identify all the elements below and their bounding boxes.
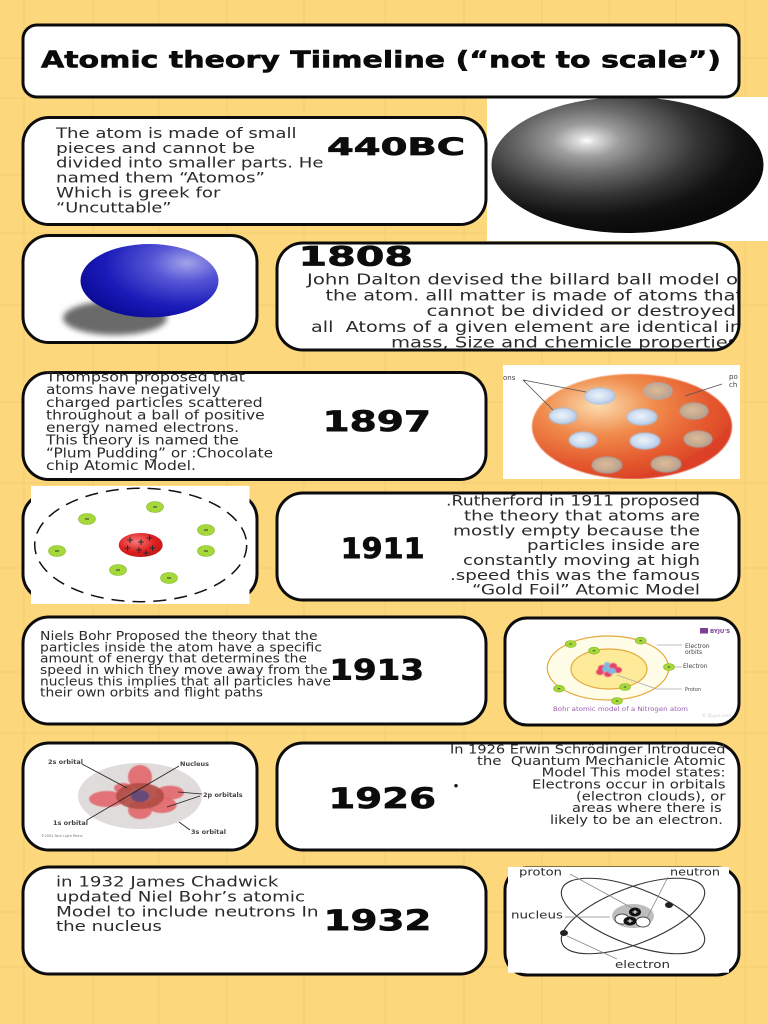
icon: sphere shadow: [63, 301, 167, 335]
year: 1926: 1926: [328, 782, 436, 816]
year: 440BC: 440BC: [327, 133, 465, 161]
text: 1926 description: the Quantum Mechanicle Atomic: [477, 753, 726, 768]
nucleus charges: +: [126, 536, 134, 546]
callouts: Electron: [683, 663, 708, 670]
callouts: orbits: [685, 649, 702, 656]
icon: nucleus: [612, 904, 654, 928]
icon: electrons: [549, 383, 712, 473]
panel: 1913: [23, 617, 486, 724]
panel: Chadwick model image: [505, 863, 739, 975]
text: 1911 description: constantly moving at high: [463, 553, 700, 569]
callouts: [503, 373, 738, 410]
text: 1932 description: updated Niel Bohr’s atomic: [56, 890, 305, 906]
panel: 1911 image backing: [23, 486, 257, 604]
text: 1926 description: [450, 742, 727, 827]
year: 1808: 1808: [298, 242, 413, 272]
text: 1913 description: their own orbits and flight paths: [40, 686, 263, 700]
text: 440BC description: Which is greek for: [56, 186, 221, 202]
title: Atomic theory Tiimeline (“not to scale”): [41, 48, 721, 74]
nucleus charges: +: [124, 544, 131, 554]
panel: 1932: [23, 867, 486, 974]
title panel: [23, 25, 739, 97]
text: 1913 description: particles inside the atom have a specific: [40, 640, 322, 654]
year: 1932: 1932: [324, 904, 431, 938]
panel: blue sphere: [23, 236, 257, 342]
callouts: neutron: [670, 866, 720, 878]
text: 440BC description: named them “Atomos”: [56, 170, 265, 186]
text: 1926 description: (electron clouds), or: [576, 788, 727, 803]
text: 1932 description: in 1932 James Chadwick: [56, 874, 280, 890]
icon: dashed orbit: [35, 488, 247, 602]
text: 1911 description: “Gold Foil” Atomic Model: [472, 582, 700, 598]
text: 1911 description: mostly empty because the: [453, 524, 700, 540]
text: 440BC description: The atom is made of small: [55, 126, 296, 142]
nucleus charges: +: [137, 538, 145, 548]
panel: 1911: [277, 493, 739, 600]
nucleus charges: +: [146, 534, 153, 544]
image: Rutherford model: [31, 486, 250, 604]
year: 1897: 1897: [322, 406, 431, 438]
image backing: [508, 867, 729, 973]
text: 440BC description: pieces and cannot be: [56, 141, 255, 157]
year: 1913: 1913: [329, 654, 424, 687]
text: 440BC description: “Uncuttable”: [56, 200, 172, 216]
panel: 1926: [277, 742, 739, 850]
text: 1897 description: “Plum Pudding” or :Chocolate: [46, 446, 273, 462]
text: 1932 description: the nucleus: [56, 919, 162, 935]
callouts: electron: [615, 959, 670, 971]
panel: 1897: [23, 370, 486, 480]
callouts: [41, 758, 243, 838]
text: 1932 description: Model to include neutrons In: [56, 904, 319, 920]
callouts: Nucleus: [180, 760, 209, 768]
watermark: © Byjus.com: [702, 712, 731, 719]
text: 1926 description: likely to be an electron.: [550, 812, 723, 827]
icon: p orbital lobes: [89, 765, 184, 819]
text: 1808 description: cannot be divided or destroyed: [426, 302, 736, 320]
callouts: [511, 866, 720, 971]
icon: orbits: [552, 863, 714, 969]
text: 1911 description: the theory that atoms are: [464, 508, 700, 524]
text: 1913 description: Niels Bohr Proposed the theory that the: [40, 629, 318, 643]
callouts: Electron: [685, 643, 710, 650]
panel outline: [277, 243, 739, 350]
icon: blue sphere: [80, 244, 218, 317]
icon: orbits: [547, 636, 669, 700]
text: 1911 description: [446, 494, 700, 598]
text: 1897 description: This theory is named the: [45, 434, 239, 448]
text: 1808 description: mass, Size and chemicle properties: [391, 334, 738, 352]
text: 1926 description: Model This model states:: [542, 765, 726, 780]
text: 1897 description: atoms have negatively: [46, 383, 221, 398]
icon: nucleus: [596, 662, 622, 677]
logo: [700, 628, 730, 635]
text: 1897 description: Thompson proposed that: [45, 370, 245, 386]
panel: 1808: [277, 242, 746, 352]
callouts: nucleus: [511, 910, 563, 922]
icon: electrons: [554, 637, 674, 704]
nucleus charges: +: [149, 544, 156, 554]
text: 1897 description: chip Atomic Model.: [46, 459, 196, 474]
callouts: ©2002 Nick Light Reins: [41, 834, 83, 838]
callouts: proton: [519, 866, 562, 878]
text: 440BC description: divided into smaller parts. He: [56, 156, 324, 172]
callouts: po: [729, 373, 738, 381]
callouts: 2s orbital: [48, 758, 83, 766]
text: 1897 description: charged particles scattered: [46, 396, 263, 411]
text: 1926 description: areas where there is: [572, 800, 722, 815]
text: 1932 description: [56, 874, 319, 935]
text: 1808 description: [306, 270, 746, 352]
callouts: 3s orbital: [191, 828, 226, 836]
text: 1897 description: throughout a ball of positive: [46, 408, 265, 424]
caption: Bohr atomic model of a Nitrogen atom: [553, 705, 688, 713]
nucleus charges: [124, 534, 156, 559]
text: 1913 description: nucleus this implies that all particles have: [40, 674, 331, 688]
callouts: Proton: [685, 687, 701, 693]
nucleus charges: +: [142, 549, 150, 559]
icon: 3s orbital cloud: [78, 763, 202, 829]
callouts: ons: [503, 374, 516, 382]
text: 1808 description: all Atoms of a given element are identical in: [311, 318, 742, 336]
panel: orbital model image: [23, 743, 257, 850]
text: 1911 description: .Rutherford in 1911 proposed: [446, 494, 700, 510]
callouts: [617, 643, 710, 693]
icon: orbit electrons: [560, 902, 673, 936]
callouts: 2p orbitals: [203, 791, 243, 799]
icon: nucleus: [119, 533, 163, 557]
text: 1911 description: particles inside are: [527, 538, 700, 554]
callouts: 1s orbital: [53, 819, 88, 827]
image: plum pudding model: [503, 365, 740, 480]
icon: positive sphere: [532, 374, 740, 480]
text: 1926 description: Electrons occur in orbitals: [532, 777, 726, 792]
icon: green electrons: [48, 502, 214, 584]
image: grey sphere: [487, 97, 768, 241]
bullet dot: [454, 784, 458, 787]
text: 1911 description: .speed this was the famous: [450, 568, 700, 584]
panel: 440BC: [23, 118, 486, 224]
text: 440BC description: [55, 126, 323, 216]
text: 1926 description: In 1926 Erwin Schrödinger Introduced: [450, 742, 726, 756]
text: 1897 description: [45, 370, 273, 474]
text: 1808 description: the atom. alll matter is made of atoms that: [326, 286, 743, 304]
text: 1897 description: energy named electrons.: [46, 421, 239, 436]
text: 1913 description: amount of energy that determines the: [40, 652, 307, 666]
year: 1911: 1911: [341, 532, 425, 566]
text: 1913 description: [40, 629, 331, 700]
text: 1808 description: John Dalton devised the billard ball model of: [306, 270, 746, 288]
text: 1913 description: speed in which they move away from the: [40, 663, 328, 677]
panel: Bohr model image: [505, 618, 739, 725]
nucleus charges: +: [135, 546, 143, 556]
callouts: ch: [729, 381, 737, 389]
logo: BYJU'S: [710, 629, 730, 635]
